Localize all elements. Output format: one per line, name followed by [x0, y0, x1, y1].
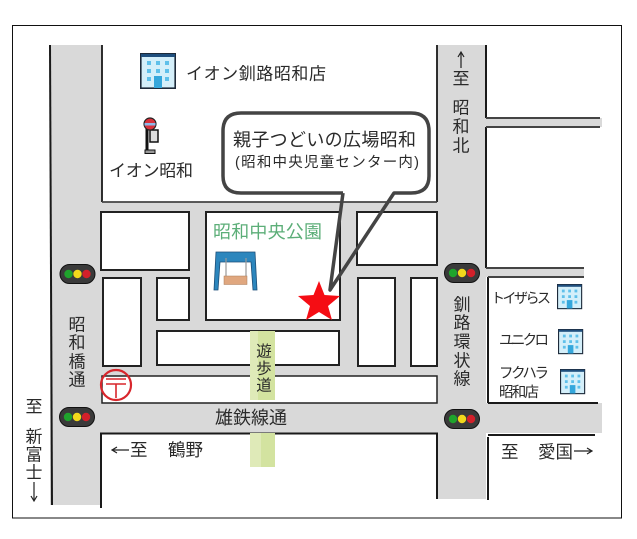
walkway label: 歩: [256, 360, 272, 378]
direction: Aikoku: [501, 442, 592, 462]
park name: 昭和中央公園: [213, 222, 322, 242]
walkway label: [256, 342, 272, 394]
icon: swing: [214, 252, 257, 290]
road label: Kushiro ring line: [454, 296, 470, 388]
city blocks: [101, 212, 437, 403]
label: Uniqlo: ユニクロ: [499, 332, 549, 349]
icon: building Fukuhara: [561, 370, 585, 394]
road label: Kushiro ring line: 路: [454, 314, 470, 332]
direction: Shinfuji: [26, 398, 42, 501]
label: Fukuhara: [499, 365, 549, 401]
road label: Showabashi: 和: [68, 334, 86, 352]
icon: building Toys R Us: [558, 285, 582, 309]
direction: Tsuruno: 至: [130, 440, 148, 460]
icon: building Aeon: [141, 54, 175, 88]
traffic light SE: [444, 410, 480, 428]
label: Fukuhara: フクハラ: [499, 365, 549, 382]
direction: Aikoku: 至: [501, 442, 518, 462]
road network: [50, 45, 602, 508]
icon: building Uniqlo: [559, 330, 583, 354]
traffic light NW: [60, 264, 95, 284]
direction: Shinfuji: 富: [26, 446, 42, 464]
road label: Showabashi: 昭: [68, 316, 86, 334]
road label: Showabashi: 橋: [68, 352, 86, 372]
walkway label: 道: [256, 376, 272, 394]
label: Toys R Us: トイザらス: [491, 290, 551, 306]
road label: Kushiro ring line: 線: [454, 370, 470, 388]
direction: Shinfuji: 至: [26, 398, 42, 416]
icon: bus stop: [144, 118, 158, 154]
direction: Showa north: 和: [452, 118, 470, 136]
callout subtitle: (昭和中央児童センター内): [235, 154, 419, 171]
direction: Showa north: 至: [452, 70, 470, 88]
walkway: [250, 331, 275, 467]
star: location marker: [298, 281, 340, 320]
direction: Shinfuji: 士: [26, 464, 42, 482]
direction: Tsuruno: [112, 440, 203, 460]
road label: Kushiro ring line: 環: [454, 332, 470, 352]
road label: Kushiro ring line: 状: [454, 352, 470, 370]
traffic light SW: [60, 408, 94, 426]
callout title: 親子つどいの広場昭和: [233, 130, 416, 150]
road label: Showabashi: [68, 316, 86, 390]
road label: Yutetsu line: 雄鉄線通: [215, 408, 287, 428]
direction: Aikoku: 愛国: [538, 442, 573, 462]
road label: Kushiro ring line: 釧: [454, 296, 470, 314]
walkway label: 遊: [256, 342, 272, 360]
label: bus stop: イオン昭和: [109, 162, 193, 180]
direction: Tsuruno: 鶴野: [168, 440, 203, 460]
direction: Showa north: 北: [452, 136, 470, 156]
label: Fukuhara: 昭和店: [499, 384, 539, 401]
label: Aeon store: イオン釧路昭和店: [186, 64, 326, 84]
direction: Shinfuji: 新: [26, 428, 42, 446]
traffic light NE: [444, 264, 480, 282]
icon: post office: [101, 370, 131, 400]
direction: Showa north: [452, 52, 470, 156]
road label: Showabashi: 通: [68, 370, 86, 390]
direction: Showa north: 昭: [452, 98, 470, 118]
callout: [223, 113, 429, 290]
